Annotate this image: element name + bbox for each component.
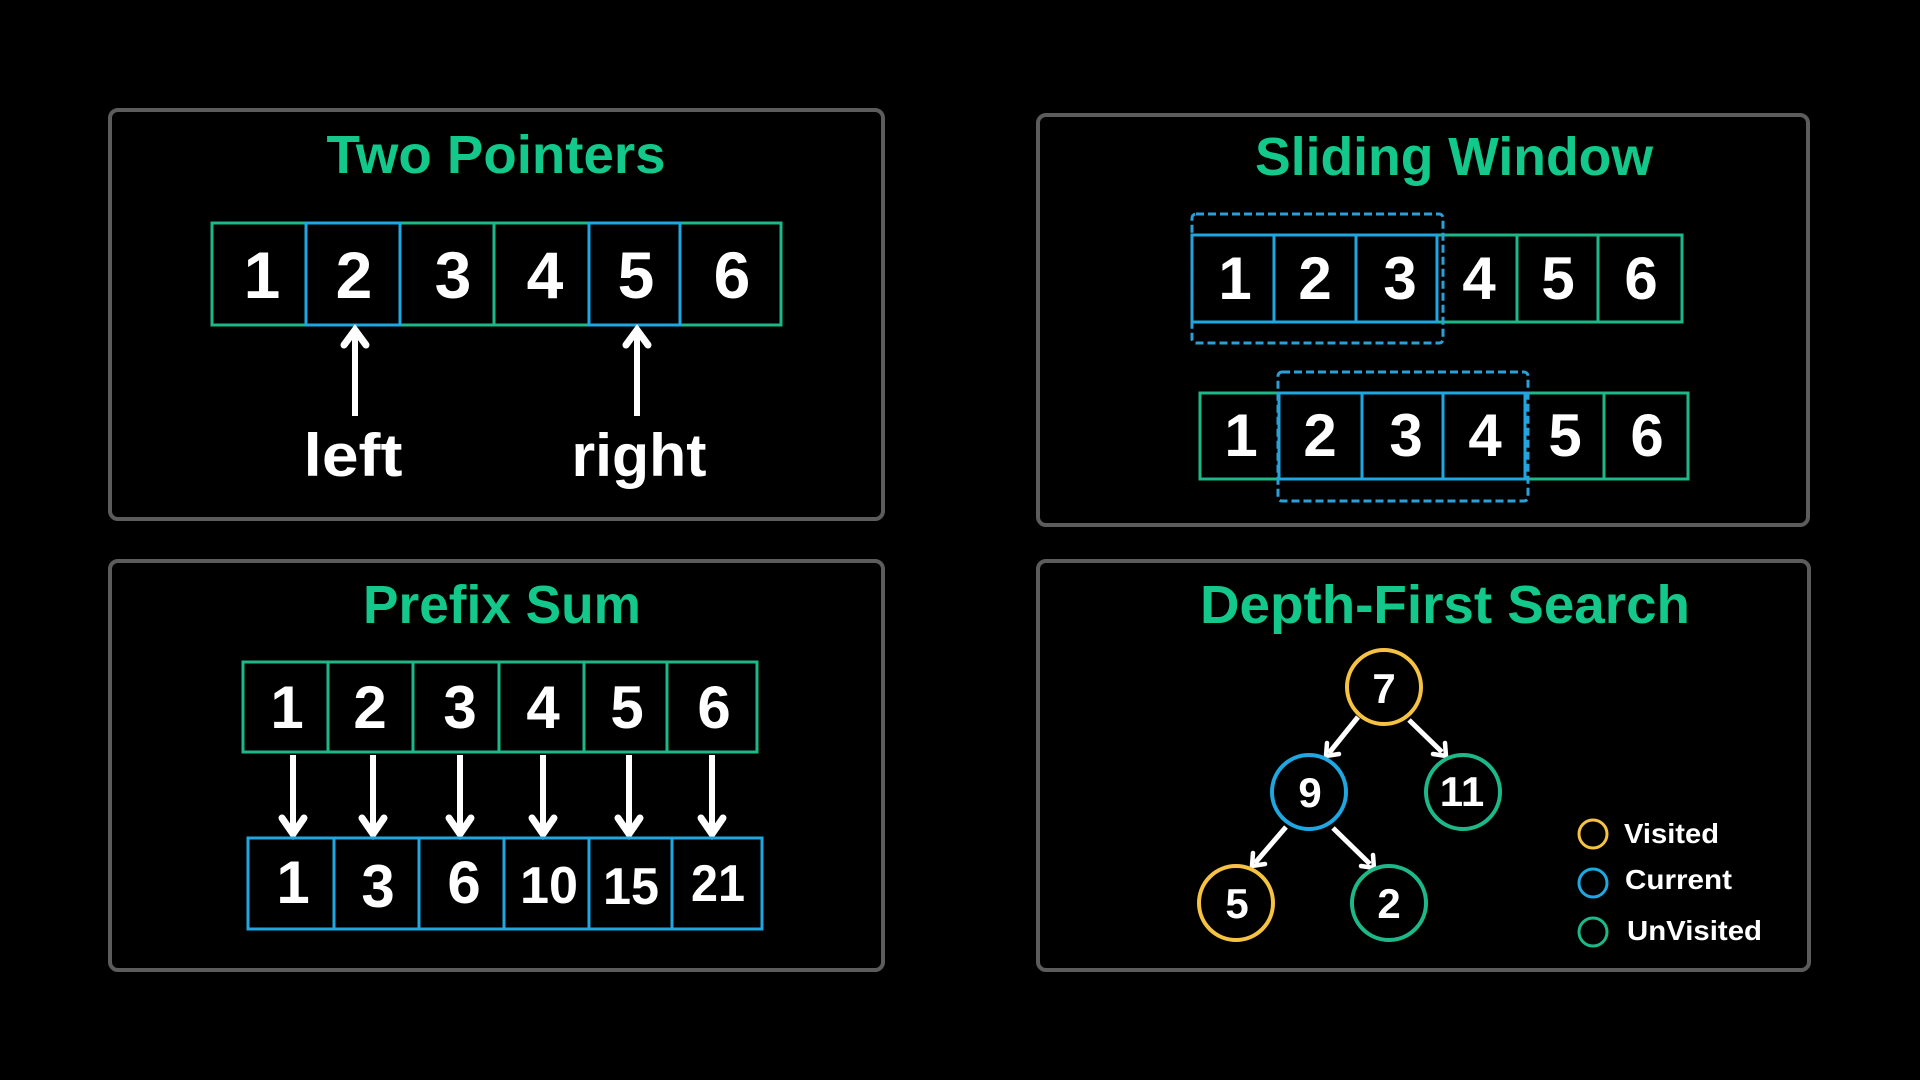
prefix sum array: 10: [520, 857, 578, 915]
heading: Prefix Sum: Prefix Sum: [363, 575, 641, 635]
legend item: current: [1579, 864, 1732, 897]
tree edges: [1252, 717, 1446, 868]
input array: 3: [443, 674, 477, 741]
array: window at second position: 1: [1224, 402, 1258, 469]
array: window at first position: [1192, 235, 1682, 322]
dashed window: first position: [1192, 214, 1443, 343]
array: window at second position: 5: [1548, 402, 1582, 469]
array: window at second position: 3: [1389, 402, 1423, 469]
array with two highlighted cells: [212, 223, 781, 325]
label: left: left: [304, 422, 403, 489]
input array: 4: [526, 674, 560, 741]
arrow: left pointer: [344, 330, 366, 416]
array: window at first position: 5: [1541, 245, 1575, 312]
array: window at second position: 6: [1630, 402, 1664, 469]
node 7 visited: [1347, 650, 1421, 724]
array with two highlighted cells: 2: [336, 238, 372, 312]
input array: 2: [353, 674, 387, 741]
node 9 current: [1272, 755, 1346, 829]
prefix sum array: [248, 838, 762, 929]
array: window at first position: 1: [1218, 245, 1252, 312]
legend item: visited: Visited: [1624, 818, 1719, 849]
node 9 current: 9: [1298, 769, 1322, 816]
node 5 visited: 5: [1225, 880, 1249, 927]
legend item: unvisited: UnVisited: [1627, 915, 1762, 946]
input array: 5: [610, 674, 644, 741]
array with two highlighted cells: 3: [435, 238, 471, 312]
node 2 unvisited: 2: [1377, 880, 1401, 927]
panel: depth-first search: [1038, 561, 1809, 970]
legend item: current: Current: [1625, 864, 1732, 895]
prefix sum array: 21: [691, 855, 745, 913]
prefix sum array: 15: [603, 858, 659, 916]
array: window at first position: 2: [1298, 245, 1332, 312]
input array: 6: [697, 674, 731, 741]
heading: Two Pointers: Two Pointers: [326, 125, 666, 185]
array: window at first position: 3: [1383, 245, 1417, 312]
node 7 visited: 7: [1372, 665, 1396, 712]
legend: [1579, 818, 1762, 946]
panel: two pointers: [110, 110, 883, 519]
prefix sum array: 1: [276, 849, 310, 916]
panel: sliding window: [1038, 115, 1808, 525]
array: window at second position: 2: [1303, 402, 1337, 469]
node 5 visited: [1199, 866, 1273, 940]
dashed window: second position: [1278, 372, 1528, 501]
panel: prefix sum: [110, 561, 883, 970]
array: window at first position: 4: [1462, 245, 1496, 312]
array: window at first position: 6: [1624, 245, 1658, 312]
input array: 1: [270, 674, 304, 741]
node 2 unvisited: [1352, 866, 1426, 940]
array with two highlighted cells: 5: [618, 238, 654, 312]
array with two highlighted cells: 1: [244, 238, 280, 312]
arrow: right pointer: [626, 330, 648, 416]
prefix sum array: 6: [447, 849, 481, 916]
prefix sum array: 3: [361, 853, 395, 920]
array: window at second position: 4: [1468, 402, 1502, 469]
legend item: visited: [1579, 818, 1719, 849]
array with two highlighted cells: 4: [527, 238, 564, 312]
arrows: input to prefix sums: [282, 755, 723, 834]
heading: Depth-First Search: Depth-First Search: [1200, 575, 1690, 635]
label: right: right: [572, 422, 707, 489]
heading: Sliding Window: Sliding Window: [1255, 127, 1654, 187]
node 11 unvisited: [1426, 755, 1500, 829]
node 11 unvisited: 11: [1440, 768, 1484, 815]
array: window at second position: [1200, 393, 1688, 479]
input array: [243, 662, 757, 752]
array with two highlighted cells: 6: [714, 238, 750, 312]
